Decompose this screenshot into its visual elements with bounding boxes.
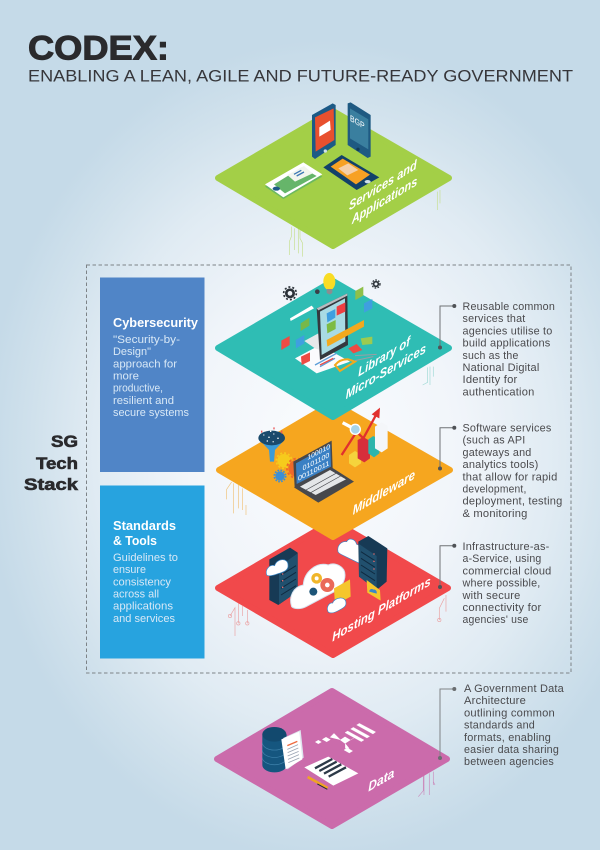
panel: cybersecurity: more	[113, 370, 139, 382]
labels: Micro-Services	[346, 340, 426, 402]
icon: central cloud	[291, 564, 345, 609]
callout: middleware: deployment, testing	[462, 496, 562, 508]
icon: sketch paper	[295, 345, 350, 373]
callout: micro-services: build applications	[462, 338, 551, 350]
icons	[266, 536, 387, 613]
icon: tablet	[317, 293, 364, 360]
callout: micro-services: such as the	[462, 350, 518, 362]
icon: laptop: 00110011	[298, 458, 329, 483]
callout: micro-services: National Digital	[462, 362, 540, 374]
callout: data: Architecture	[464, 695, 526, 707]
icon: top cloud	[338, 539, 365, 563]
callout: middleware: Software services	[462, 422, 552, 434]
callout: hosting platforms: with secure	[461, 590, 520, 602]
callout: data: A Government Data	[464, 683, 565, 695]
callout: hosting platforms: agencies' use	[462, 614, 528, 626]
icon: right server	[358, 536, 387, 590]
callout: micro-services: authentication	[462, 386, 534, 398]
diamond	[218, 521, 448, 655]
icon: cloud folder	[367, 580, 381, 601]
heading: SG Tech Stack: Stack	[24, 476, 79, 494]
icon: left server	[266, 548, 298, 605]
callout: data: outlining common	[464, 707, 555, 719]
icon: floating tiles	[281, 287, 372, 365]
callout: micro-services: Reusable common	[462, 301, 555, 313]
panel: standards and tools: consistency	[113, 576, 171, 588]
icon: red phone	[312, 103, 336, 159]
panel: standards and tools: Standards	[113, 518, 176, 533]
layer: hosting platforms	[218, 521, 448, 655]
panel: cybersecurity: "Security-by-	[113, 334, 180, 346]
panel: cybersecurity: Cybersecurity	[113, 315, 199, 330]
icon: keyboard	[304, 333, 320, 350]
callout: data: between agencies	[464, 756, 554, 768]
icon: data funnel	[258, 427, 285, 462]
icon: laptop: 0101100	[303, 450, 329, 473]
icon: report pages	[281, 730, 304, 769]
title	[28, 30, 573, 86]
labels: Applications	[351, 173, 417, 228]
icon: protractor and compass	[335, 354, 377, 371]
panel: standards and tools: Guidelines to	[113, 552, 178, 564]
circuit traces	[227, 482, 246, 515]
label: Middleware	[353, 466, 415, 518]
callout: middleware: & monitoring	[462, 508, 528, 520]
diamond	[219, 403, 450, 537]
diamond	[218, 281, 449, 417]
label: Data	[368, 765, 394, 794]
icons	[258, 408, 388, 503]
panel: standards and tools: and services	[113, 613, 175, 625]
callout: hosting platforms: connectivity for	[462, 602, 542, 614]
callout: middleware: that allow for rapid	[462, 471, 558, 483]
label: Hosting Platforms	[332, 573, 431, 644]
icon: document	[304, 757, 358, 786]
heading: SG Tech Stack: SG	[51, 433, 78, 451]
callout: middleware: development,	[462, 484, 526, 496]
circuit traces	[418, 772, 435, 797]
labels: Library of	[358, 333, 411, 380]
callout: hosting platforms	[438, 541, 552, 626]
circuit traces	[228, 595, 446, 636]
icon: gears	[274, 453, 306, 482]
title: CODEX:	[28, 30, 169, 68]
diamond	[218, 111, 449, 246]
panel: standards and tools	[100, 486, 204, 658]
callout: hosting platforms: a-Service, using	[462, 553, 542, 565]
callout: micro-services: services that	[462, 313, 526, 325]
callout: data: formats, enabling	[464, 732, 551, 744]
icon: light bulb	[323, 273, 335, 295]
icon: floating gears	[284, 280, 380, 300]
callout: hosting platforms: commercial cloud	[462, 565, 552, 577]
callout: data: standards and	[464, 720, 535, 732]
icons	[281, 273, 380, 373]
icon: small cloud	[327, 598, 346, 613]
callout: data	[438, 683, 565, 768]
layer: data	[217, 691, 447, 826]
icon: laptop	[293, 441, 354, 503]
panel: cybersecurity	[100, 278, 204, 472]
title: ENABLING A LEAN, AGILE AND FUTURE-READY GOVERNMENT	[28, 66, 573, 86]
icons	[265, 102, 379, 199]
panel: cybersecurity: resilient and	[113, 395, 174, 407]
callout: micro-services: agencies utilise to	[462, 325, 552, 337]
icon: database	[262, 727, 287, 772]
panel: cybersecurity: Design"	[113, 346, 151, 358]
icons	[262, 723, 376, 789]
heading: SG Tech Stack	[24, 433, 79, 494]
callout: middleware	[438, 422, 562, 520]
callout: hosting platforms: Infrastructure-as-	[462, 541, 550, 553]
heading: SG Tech Stack: Tech	[36, 455, 78, 473]
callout: hosting platforms: where possible,	[462, 578, 540, 590]
panel: standards and tools: ensure	[113, 564, 146, 576]
panel: standards and tools: across all	[113, 588, 159, 600]
panel: cybersecurity: productive,	[113, 383, 163, 395]
icon: laptop: 100010	[307, 442, 330, 462]
icon: pencil	[308, 777, 328, 789]
callout: middleware: (such as API	[462, 435, 526, 447]
callout: data: easier data sharing	[464, 744, 559, 756]
diamond	[217, 691, 447, 826]
layer: services and applications	[218, 102, 449, 257]
panel: standards and tools: & Tools	[113, 533, 157, 548]
circuit traces	[289, 190, 440, 257]
icon: bar chart with trend arrow	[342, 408, 388, 467]
icon: flow chart	[315, 723, 376, 753]
callout: middleware: analytics tools)	[462, 459, 538, 471]
panel: cybersecurity: secure systems	[113, 407, 189, 419]
panel: cybersecurity: approach for	[113, 358, 177, 370]
layer: middleware	[219, 403, 450, 537]
icon: white phone	[265, 162, 322, 199]
callout: middleware: gateways and	[462, 447, 532, 459]
layer: library of micro-services	[218, 273, 449, 417]
callout: micro-services	[438, 301, 555, 398]
circuit traces	[423, 367, 433, 385]
labels: Services and	[349, 157, 417, 214]
callout: micro-services: Identity for	[462, 374, 518, 386]
icon: orange phone	[323, 155, 379, 190]
icon: folder	[334, 579, 351, 605]
dashed SG Tech Stack frame	[86, 265, 571, 673]
icon: BGP phone: BGP	[350, 113, 365, 131]
panel: standards and tools: applications	[113, 601, 174, 613]
